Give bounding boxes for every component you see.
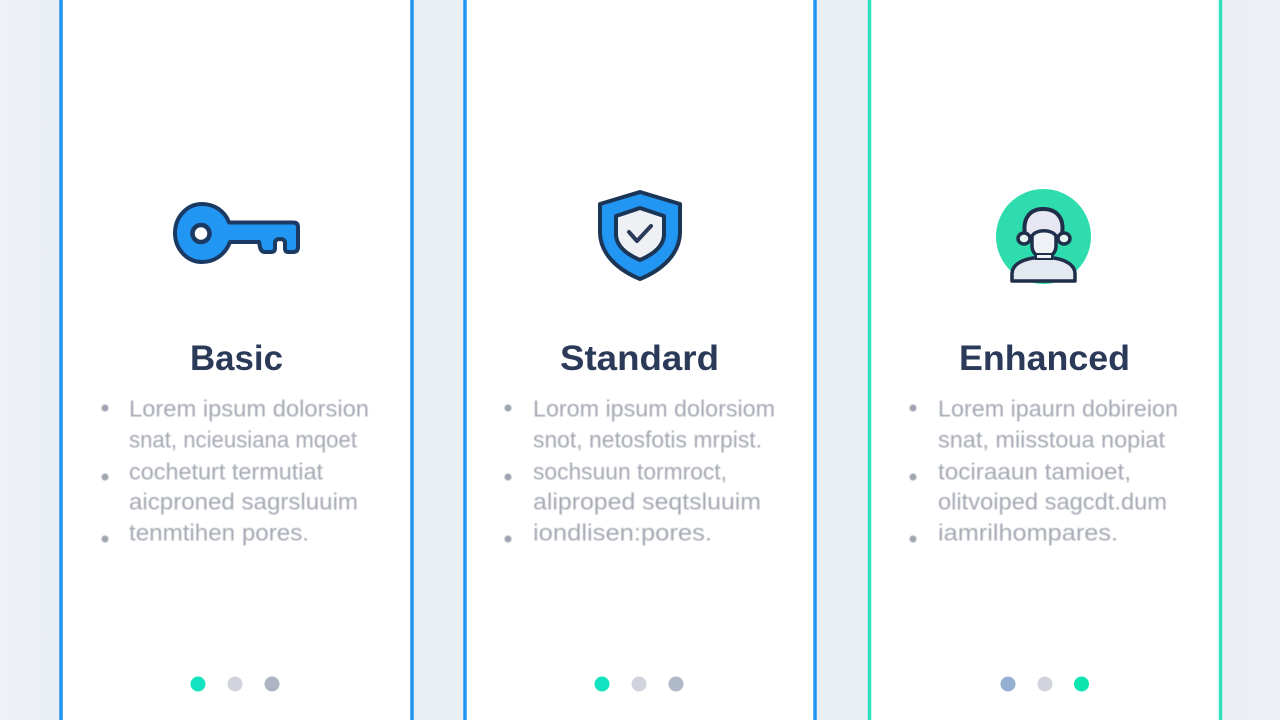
pagination dots: Standard: [594, 676, 684, 692]
heading: Standard: Standard: [560, 339, 719, 378]
text block: Basic features: tenmtihen pores.: [129, 520, 309, 546]
panel: Enhanced: [870, 0, 1220, 720]
text block: Enhanced features: olitvoiped sagcdt.dum: [938, 488, 1167, 514]
panel: Standard: [465, 0, 815, 720]
text block: Enhanced features: [910, 396, 1178, 546]
pagination dots: Basic: [190, 676, 280, 692]
text block: Basic features: aicproned sagrsluuim: [129, 488, 358, 514]
text block: Enhanced features: Lorem ipaurn dobireion: [938, 396, 1178, 422]
text block: Basic features: snat, ncieusiana mqoet: [129, 426, 358, 452]
icon: support agent with headset: [996, 189, 1091, 284]
icon: key: [175, 204, 298, 262]
text block: Standard features: aliproped seqtsluuim: [533, 488, 761, 514]
text block: Basic features: cocheturt termutiat: [129, 458, 324, 484]
text block: Enhanced features: iamrilhompares.: [938, 520, 1118, 546]
text block: Standard features: sochsuun tormroct,: [533, 458, 727, 484]
pagination dots: Enhanced: [1000, 676, 1089, 692]
heading: Enhanced: Enhanced: [959, 339, 1130, 378]
text block: Basic features: [102, 396, 369, 546]
text block: Enhanced features: tociraaun tamioet,: [938, 458, 1131, 484]
icon: shield with check: [600, 192, 680, 279]
text block: Enhanced features: snat, miisstoua nopiat: [938, 426, 1166, 452]
text block: Standard features: Lorom ipsum dolorsiom: [533, 396, 775, 422]
text block: Standard features: snot, netosfotis mrpist.: [533, 426, 762, 452]
panel: Basic: [61, 0, 412, 720]
heading: Basic: Basic: [190, 339, 283, 378]
text block: Basic features: Lorem ipsum dolorsion: [129, 396, 369, 422]
text block: Standard features: iondlisen:pores.: [533, 520, 712, 546]
text block: Standard features: [504, 396, 775, 546]
